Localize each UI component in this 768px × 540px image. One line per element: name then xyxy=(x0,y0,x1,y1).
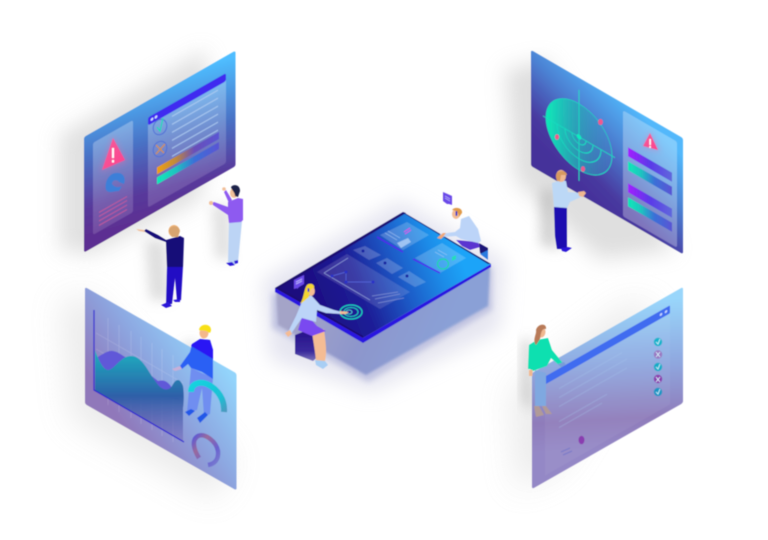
panel: central table xyxy=(262,192,505,392)
panel: alert dashboard xyxy=(84,51,236,252)
table side xyxy=(272,266,492,382)
radar chart xyxy=(543,69,615,202)
icon: chat bubble right xyxy=(443,192,452,205)
icon: cross circle xyxy=(151,139,169,159)
person: man seated xyxy=(437,208,488,260)
seat xyxy=(295,329,323,361)
icon: check circle xyxy=(151,117,169,137)
upper right cards xyxy=(377,222,466,273)
table screen xyxy=(275,212,491,338)
panel: radar dashboard xyxy=(531,50,683,254)
person: man in purple sweater xyxy=(209,185,243,266)
alert card xyxy=(93,120,133,235)
person: man in blue sweater xyxy=(172,325,213,423)
shadows behind panels xyxy=(60,50,675,500)
red text lines xyxy=(99,196,127,225)
header bar xyxy=(545,305,670,385)
coloured bars xyxy=(628,147,672,232)
text lines xyxy=(172,90,218,156)
main chart card xyxy=(317,254,410,309)
browser card xyxy=(148,73,226,208)
person: woman seated xyxy=(285,284,349,369)
faint text lines xyxy=(559,350,627,428)
radar pink blips xyxy=(555,119,603,172)
person: man in navy sweater xyxy=(136,225,184,308)
table edge xyxy=(275,264,491,343)
donut chart: cyan arc xyxy=(191,383,224,412)
donut chart: purple ring xyxy=(194,435,218,465)
person: man in light shirt xyxy=(552,170,586,252)
person: woman in teal sweater xyxy=(528,325,566,417)
purple marker xyxy=(561,436,584,455)
area chart xyxy=(94,310,184,442)
coloured progress bars xyxy=(157,132,219,184)
icon: warning triangle xyxy=(642,131,660,152)
list card xyxy=(545,308,670,476)
chart grid xyxy=(96,318,183,442)
panel: checklist xyxy=(532,287,683,489)
small cards xyxy=(353,246,426,287)
checklist icons xyxy=(654,338,662,396)
icon: warning triangle xyxy=(100,136,127,172)
panel: analytics chart xyxy=(85,287,236,490)
icon: blue badge xyxy=(106,173,125,192)
icon: chat bubble left xyxy=(294,275,304,289)
icon: target rings xyxy=(340,305,362,319)
info card xyxy=(623,110,677,248)
